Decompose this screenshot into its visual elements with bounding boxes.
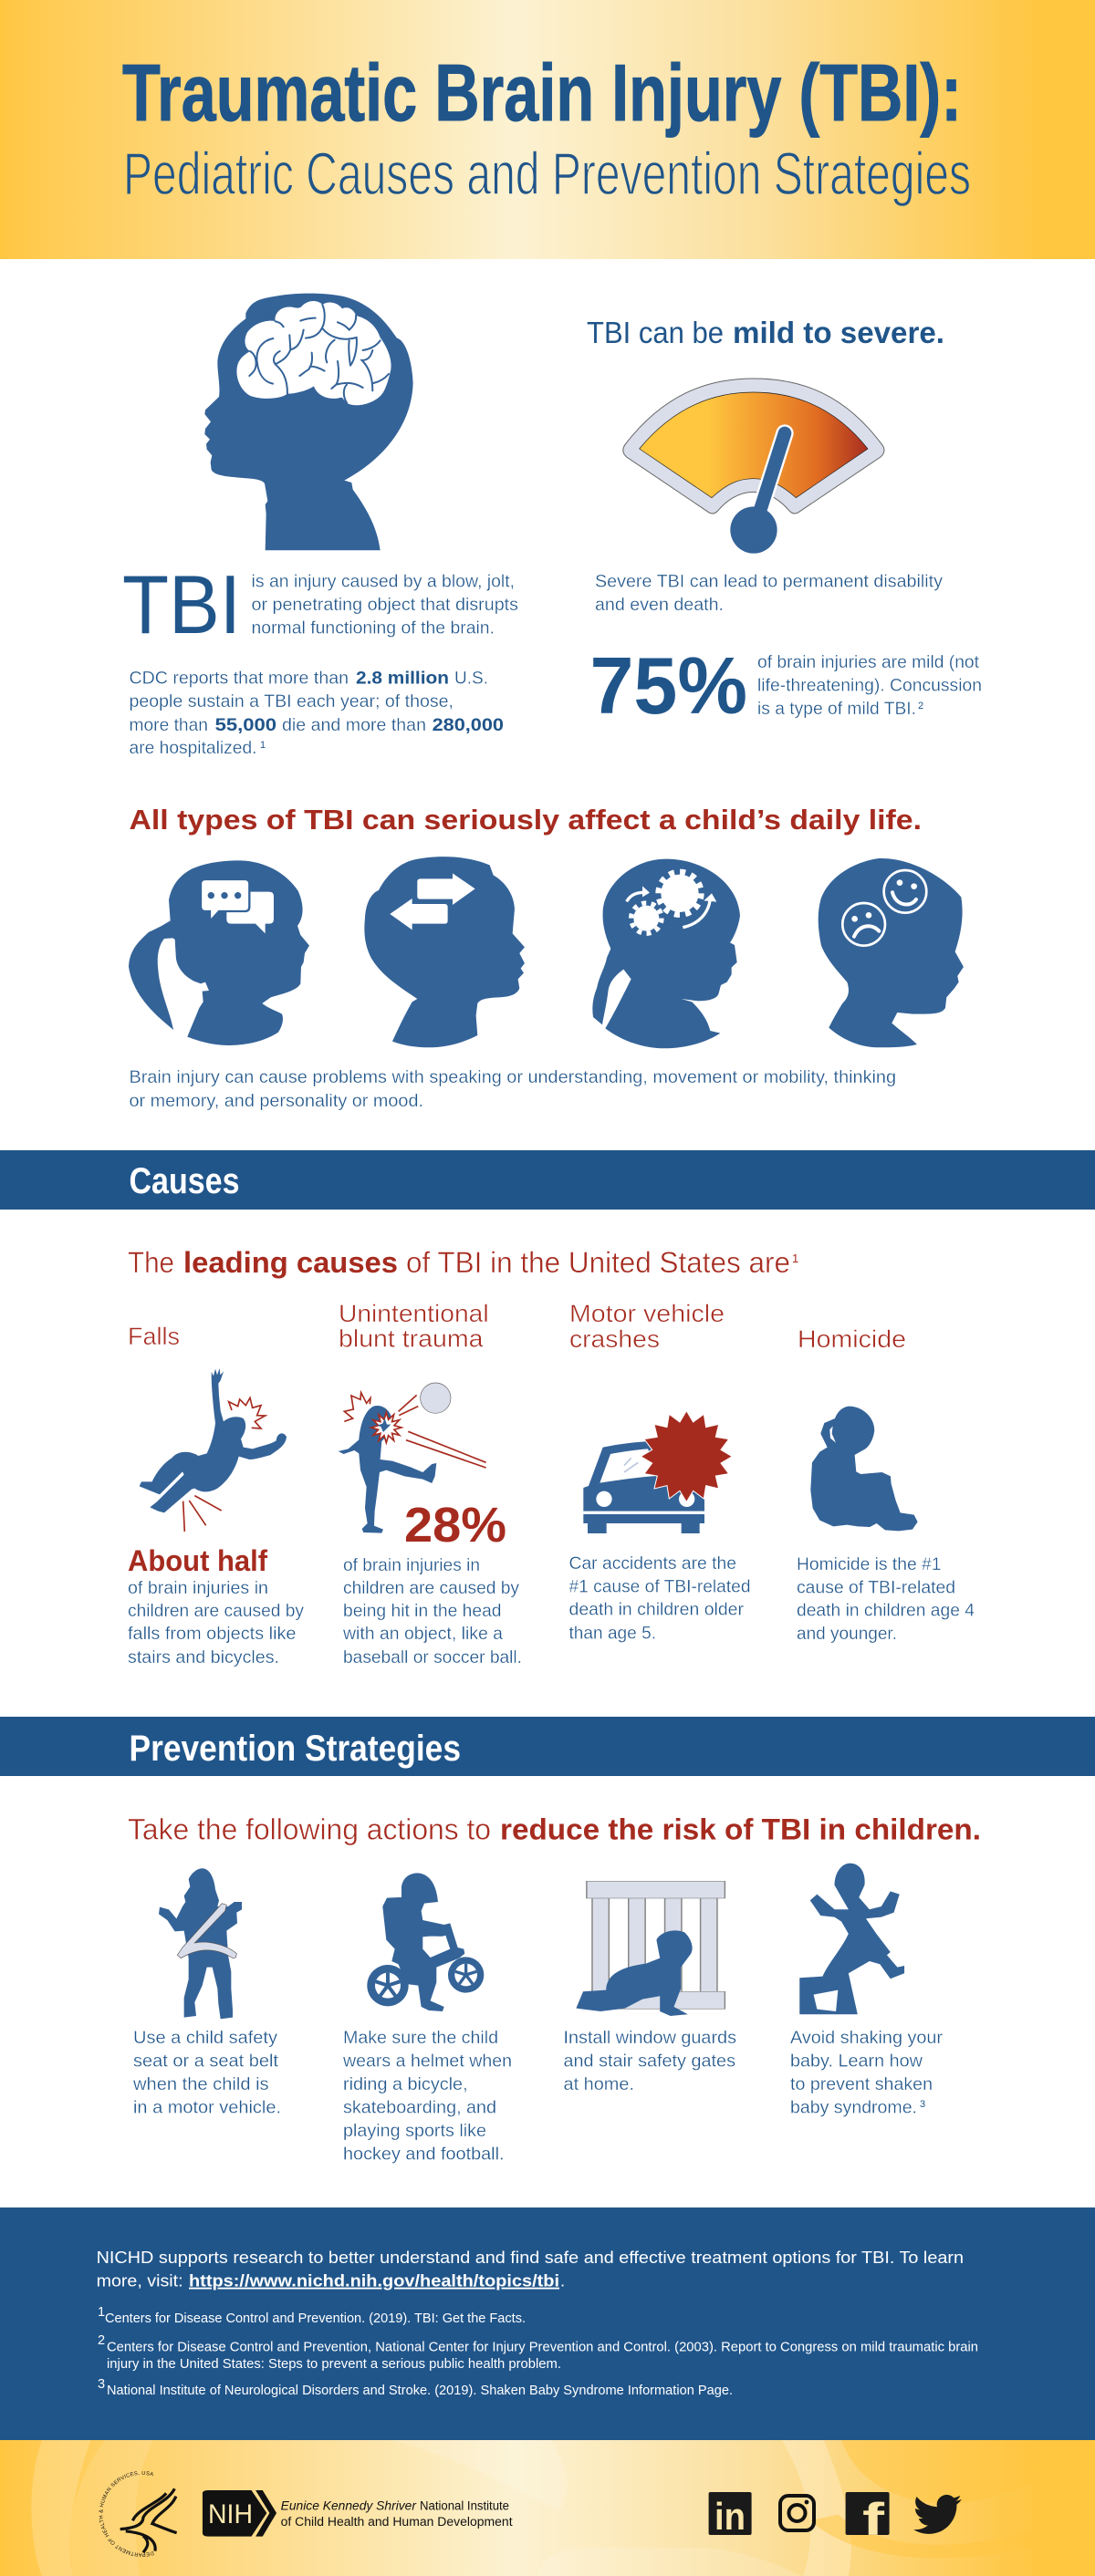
logo text: NICHD name: of Child Health and Human Development xyxy=(281,2515,513,2529)
icon: LinkedIn: in xyxy=(714,2495,746,2538)
references: 1 xyxy=(98,2305,105,2320)
column: safety seat xyxy=(132,1868,281,2118)
heading: leading causes: of TBI in the United States are xyxy=(406,1246,790,1279)
heading: daily life: All types of TBI can seriously affect a child’s daily life. xyxy=(130,804,922,836)
icon: child head with brain xyxy=(204,294,413,550)
logo: HHS seal: DEPARTMENT OF HEALTH & HUMAN SERVICES, USA xyxy=(99,2470,154,2557)
column: homicide: and younger. xyxy=(797,1624,897,1644)
logo: NIH xyxy=(203,2490,276,2537)
column: unintentional blunt trauma xyxy=(339,1300,522,1667)
header banner xyxy=(0,0,1095,259)
CDC statistics text xyxy=(130,668,504,758)
icon: child with seat belt xyxy=(159,1868,242,2019)
column: unintentional blunt trauma: being hit in the head xyxy=(343,1601,502,1621)
research note xyxy=(97,2248,964,2290)
icon: Twitter xyxy=(913,2495,962,2534)
column: motor vehicle crashes: death in children older xyxy=(569,1600,744,1620)
panel: what is TBI xyxy=(122,294,518,758)
column: falls: of brain injuries in xyxy=(128,1578,268,1598)
column: homicide: Homicide is the #1 xyxy=(797,1554,942,1574)
panel: mild to severe xyxy=(587,316,982,731)
column: motor vehicle crashes: Motor vehicle xyxy=(569,1300,725,1327)
icon: baby at guard rail xyxy=(576,1881,725,2016)
CDC statistics text: die and more than xyxy=(282,715,426,735)
severe TBI text: Severe TBI can lead to permanent disability xyxy=(595,571,943,591)
column: avoid shaking xyxy=(790,1864,943,2118)
column: helmet xyxy=(342,1873,512,2165)
severe TBI text xyxy=(595,571,943,615)
icon: toddler on step xyxy=(799,1864,904,2014)
icon: falling child xyxy=(140,1368,287,1532)
big TBI label: TBI xyxy=(122,559,241,651)
stat description: of brain injuries are mild (not xyxy=(757,652,980,672)
severe TBI text: and even death. xyxy=(595,595,724,615)
panel: research and references xyxy=(0,2207,1095,2440)
column: falls: About half xyxy=(128,1544,267,1577)
column: helmet: wears a helmet when xyxy=(342,2051,512,2072)
research note: more, visit: xyxy=(97,2271,183,2290)
column: falls: Falls xyxy=(128,1323,180,1350)
column: motor vehicle crashes: #1 cause of TBI-related xyxy=(569,1577,750,1597)
icon: child on bicycle with helmet xyxy=(367,1873,484,2011)
icon: seated child xyxy=(810,1407,918,1531)
column: window guards: Install window guards xyxy=(564,2028,736,2048)
icon: severity gauge xyxy=(623,379,884,554)
references: National Institute of Neurological Disorders and Stroke. (2019). Shaken Baby Syndrome Information Page. xyxy=(107,2384,733,2398)
column: motor vehicle crashes: crashes xyxy=(569,1325,660,1353)
column: avoid shaking: baby syndrome. xyxy=(790,2098,917,2118)
column: helmet: hockey and football. xyxy=(343,2145,504,2165)
CDC statistics text: 1 xyxy=(260,740,266,751)
column: falls xyxy=(128,1323,304,1667)
column: falls: children are caused by xyxy=(128,1601,304,1621)
heading: mild to severe: TBI can be xyxy=(587,316,724,349)
logo text: NICHD name: National Institute xyxy=(420,2499,509,2513)
column: homicide xyxy=(797,1325,975,1644)
panel: prevention xyxy=(128,1813,981,2165)
column: unintentional blunt trauma: blunt trauma xyxy=(339,1325,485,1353)
icon: Facebook xyxy=(846,2492,890,2545)
column: avoid shaking: to prevent shaken xyxy=(790,2074,933,2094)
references: injury in the United States: Steps to prevent a serious public health problem. xyxy=(107,2357,561,2372)
CDC statistics text: CDC reports that more than xyxy=(130,668,349,688)
icon: car crash xyxy=(583,1411,732,1533)
column: homicide: cause of TBI-related xyxy=(797,1578,955,1598)
definition text: is an injury caused by a blow, jolt, xyxy=(252,571,515,591)
icon: child hit by ball xyxy=(339,1383,486,1533)
column: unintentional blunt trauma: Unintentional xyxy=(339,1300,489,1327)
stat: 75%: 75% xyxy=(589,640,747,731)
icon: head with gears xyxy=(592,859,740,1048)
daily life description: Brain injury can cause problems with speaking or understanding, movement or mobility, thinking xyxy=(130,1067,896,1087)
footer with logos xyxy=(0,2440,1095,2576)
heading: reduce the risk: reduce the risk of TBI in children. xyxy=(500,1813,981,1846)
daily life description: or memory, and personality or mood. xyxy=(130,1091,423,1111)
CDC statistics text: 55,000 xyxy=(215,715,276,735)
column: falls: falls from objects like xyxy=(128,1624,296,1644)
column: unintentional blunt trauma: baseball or soccer ball. xyxy=(343,1647,522,1667)
definition text xyxy=(252,571,518,639)
logo text: NICHD name xyxy=(281,2499,513,2529)
logo: HHS seal xyxy=(99,2470,177,2557)
column: safety seat: Use a child safety xyxy=(133,2028,277,2048)
references: Centers for Disease Control and Prevention. (2019). TBI: Get the Facts. xyxy=(105,2311,526,2326)
column: helmet: skateboarding, and xyxy=(343,2098,496,2118)
column: avoid shaking: Avoid shaking your xyxy=(790,2028,943,2048)
column: safety seat: seat or a seat belt xyxy=(133,2051,279,2072)
panel: causes xyxy=(128,1246,975,1667)
heading: leading causes: 1 xyxy=(792,1252,798,1265)
CDC statistics text: 2.8 million xyxy=(356,668,449,688)
stat description: is a type of mild TBI. xyxy=(757,699,916,719)
logo text: NICHD name: Eunice Kennedy Shriver xyxy=(281,2499,417,2513)
heading: reduce the risk xyxy=(128,1813,981,1846)
icon: Instagram xyxy=(780,2496,814,2530)
column: safety seat: in a motor vehicle. xyxy=(133,2098,281,2118)
column: motor vehicle crashes: Car accidents are the xyxy=(569,1553,736,1574)
column: helmet: Make sure the child xyxy=(343,2028,498,2048)
heading: reduce the risk: Take the following actions to xyxy=(128,1813,491,1846)
column: window guards: at home. xyxy=(564,2074,634,2094)
column: unintentional blunt trauma: of brain injuries in xyxy=(343,1555,480,1575)
column: avoid shaking: baby. Learn how xyxy=(790,2051,923,2072)
column: motor vehicle crashes: than age 5. xyxy=(569,1624,656,1644)
column: unintentional blunt trauma: children are caused by xyxy=(343,1578,519,1598)
CDC statistics text: U.S. xyxy=(454,668,488,688)
CDC statistics text: 280,000 xyxy=(433,715,504,735)
daily life description xyxy=(130,1067,896,1111)
CDC statistics text: more than xyxy=(130,715,208,735)
column: homicide: death in children age 4 xyxy=(797,1601,975,1621)
icon: Facebook: f xyxy=(862,2494,884,2545)
references: 3 xyxy=(98,2377,105,2392)
heading: leading causes: leading causes xyxy=(183,1246,398,1279)
icon: head with arrows xyxy=(364,857,525,1047)
icon: head with faces xyxy=(819,858,964,1047)
research note: . xyxy=(560,2271,565,2290)
heading: mild to severe: mild to severe. xyxy=(733,316,944,349)
research note: NICHD supports research to better understand and find safe and effective treatment options for TBI. To learn xyxy=(97,2248,964,2267)
column: falls: stairs and bicycles. xyxy=(128,1647,279,1667)
column: window guards xyxy=(564,1881,736,2094)
column: homicide: Homicide xyxy=(798,1325,906,1353)
icon: head with speech bubbles xyxy=(129,860,309,1045)
column: motor vehicle crashes xyxy=(569,1300,750,1644)
section bar: prevention strategies: Prevention Strategies xyxy=(130,1729,461,1769)
heading: leading causes xyxy=(128,1246,798,1279)
definition text: or penetrating object that disrupts xyxy=(252,595,518,615)
references: Centers for Disease Control and Prevention, National Center for Injury Prevention and Control. (2003). Report to Congress on mild traumatic brain xyxy=(107,2341,978,2355)
stat description xyxy=(757,652,982,719)
research note: https://www.nichd.nih.gov/health/topics/tbi xyxy=(189,2271,559,2290)
definition text: normal functioning of the brain. xyxy=(252,618,495,639)
heading: leading causes: The xyxy=(128,1246,174,1279)
column: unintentional blunt trauma: with an object, like a xyxy=(342,1624,503,1644)
column: helmet: playing sports like xyxy=(343,2121,486,2141)
column: avoid shaking: 3 xyxy=(920,2099,925,2110)
heading: mild to severe xyxy=(587,316,944,349)
references: 2 xyxy=(98,2333,105,2348)
logo: NIH: NIH xyxy=(208,2499,253,2529)
column: window guards: and stair safety gates xyxy=(564,2051,735,2072)
section bar: prevention strategies xyxy=(0,1717,1095,1776)
references xyxy=(98,2305,978,2398)
stat: 28%: 28% xyxy=(404,1498,506,1553)
panel: effects on daily life xyxy=(129,804,964,1111)
column: helmet: riding a bicycle, xyxy=(343,2074,468,2094)
CDC statistics text: people sustain a TBI each year; of those, xyxy=(130,691,454,712)
column: safety seat: when the child is xyxy=(132,2074,269,2094)
stat description: 2 xyxy=(918,701,923,712)
section bar: causes xyxy=(0,1150,1095,1210)
section bar: causes: Causes xyxy=(130,1161,239,1201)
stat description: life-threatening). Concussion xyxy=(757,675,982,695)
CDC statistics text: are hospitalized. xyxy=(130,738,257,758)
